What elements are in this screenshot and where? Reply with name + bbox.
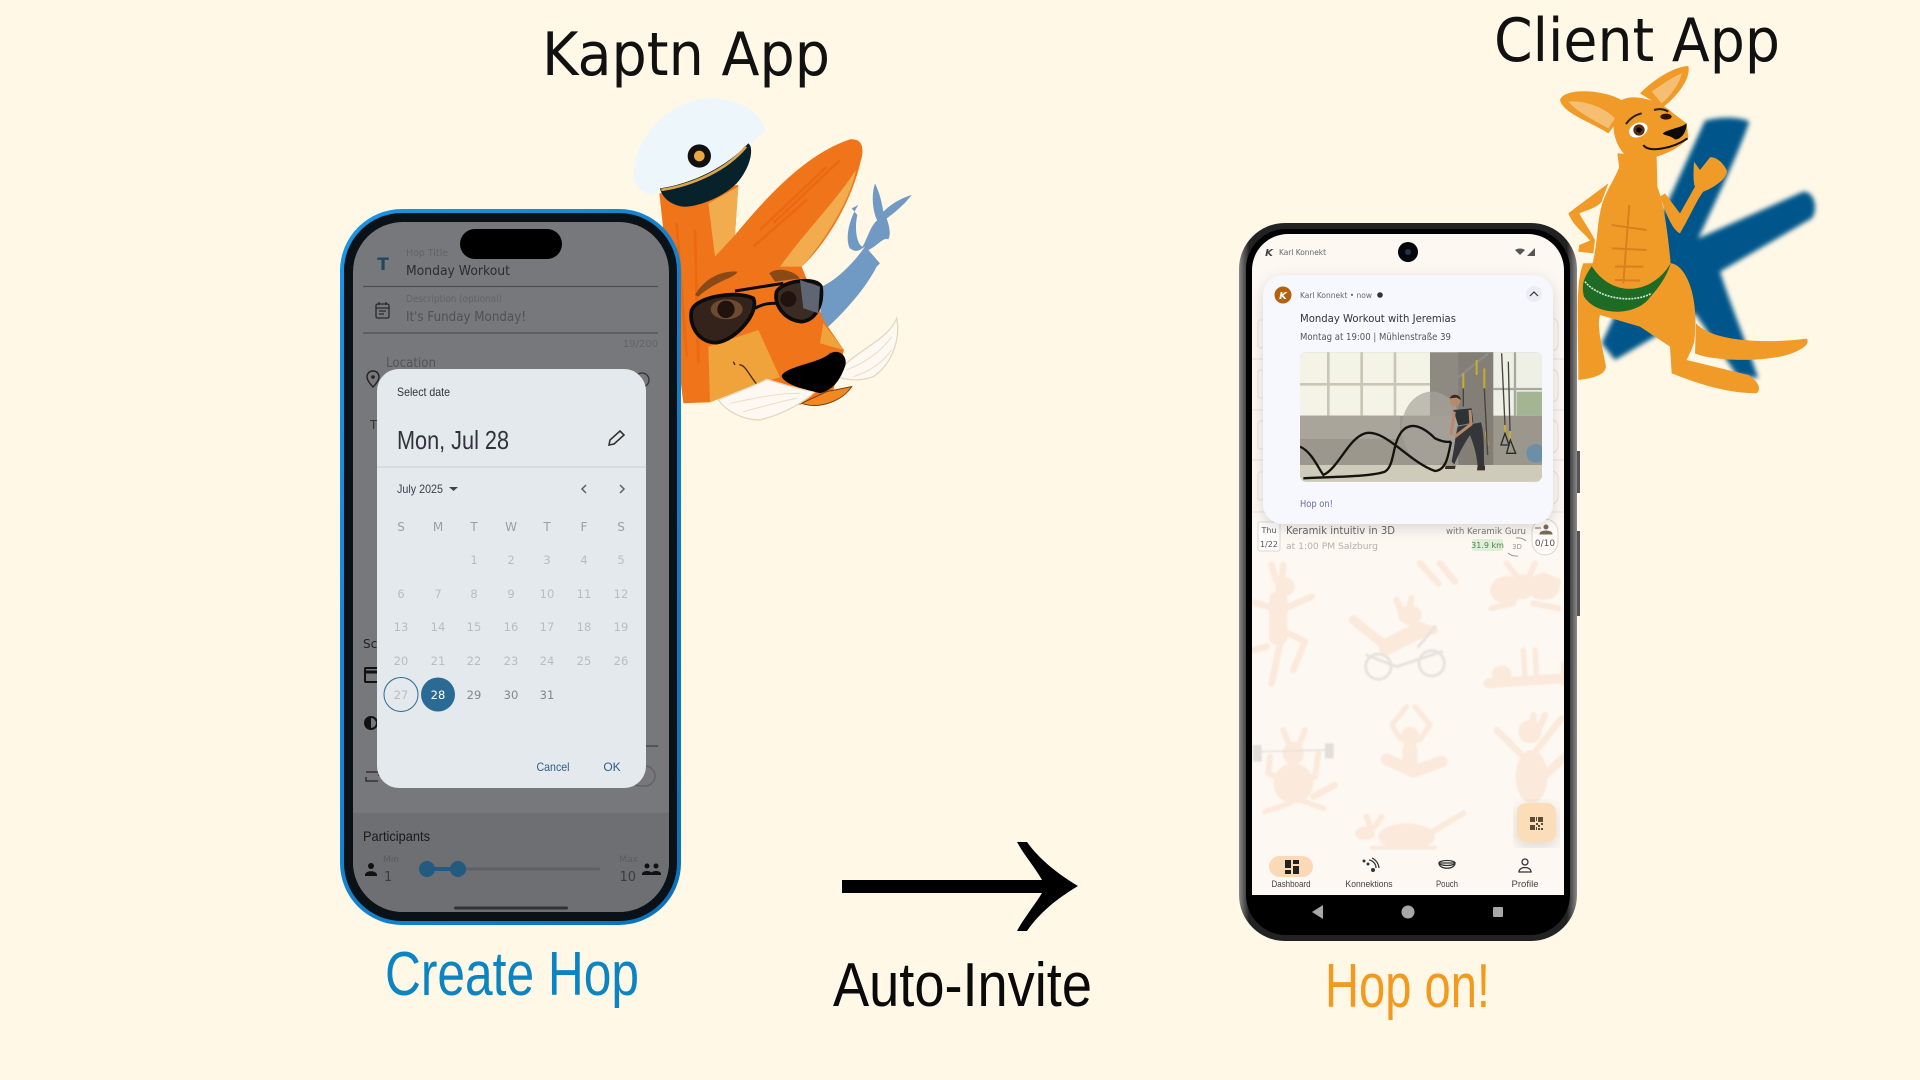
kangaroo lifting barbell bbox=[1257, 730, 1335, 812]
woman bbox=[1445, 395, 1485, 470]
illustration: fox captain mascot bbox=[633, 98, 912, 420]
calendar days: 13 bbox=[394, 620, 408, 634]
calendar days: 19 bbox=[614, 620, 628, 634]
title: Kaptn App: Kaptn App bbox=[542, 20, 830, 90]
eyebrows bbox=[695, 270, 800, 297]
list row: Keramik intuitiv in 3D: Keramik intuitiv in 3D bbox=[1286, 524, 1395, 537]
weekday header bbox=[397, 520, 625, 534]
form fields behind dialog: T bbox=[369, 418, 378, 432]
kangaroo body bbox=[1560, 66, 1808, 393]
description field: 19/200 bbox=[623, 339, 658, 350]
weekday header: T bbox=[542, 520, 551, 534]
date picker dialog: July 2025 bbox=[397, 482, 443, 496]
tab: Pouch: Pouch bbox=[1436, 879, 1458, 889]
calendar days: 24 bbox=[540, 654, 554, 668]
date picker dialog: Select date bbox=[397, 385, 450, 399]
weekday header: S bbox=[617, 520, 625, 534]
list row: Keramik intuitiv in 3D: at 1:00 PM Salzburg bbox=[1286, 542, 1378, 552]
date picker dialog: OK bbox=[603, 760, 621, 774]
calendar days bbox=[384, 553, 628, 712]
label: Auto-Invite: Auto-Invite bbox=[833, 951, 1092, 1020]
title field: Hop Title bbox=[406, 248, 448, 259]
list row: Keramik intuitiv in 3D: 3D bbox=[1512, 543, 1522, 551]
tab: Dashboard: Dashboard bbox=[1272, 879, 1310, 889]
android system buttons bbox=[1312, 905, 1503, 919]
status bar: Karl Konnekt bbox=[1279, 248, 1326, 257]
calendar days: 27 bbox=[394, 688, 408, 702]
tab: Profile: Profile bbox=[1512, 879, 1538, 889]
notification card: K bbox=[1279, 291, 1288, 302]
sunglasses bbox=[691, 280, 821, 343]
weekday header: S bbox=[397, 520, 405, 534]
bottom navigation bbox=[1269, 856, 1538, 889]
title: Client App: Client App bbox=[1494, 6, 1780, 76]
notification card: Hop on! bbox=[1300, 499, 1333, 510]
kangaroo lying bbox=[1488, 650, 1565, 683]
title field: Monday Workout bbox=[406, 264, 510, 279]
notification card: Monday Workout with Jeremias bbox=[1300, 312, 1456, 325]
label: Create Hop: Create Hop bbox=[385, 940, 639, 1009]
fox head bbox=[659, 139, 862, 405]
kangaroo resting bbox=[1355, 813, 1463, 850]
moustache bbox=[718, 318, 898, 420]
side buttons bbox=[1577, 451, 1580, 616]
notification card: Karl Konnekt • now bbox=[1300, 291, 1372, 300]
list row: Keramik intuitiv in 3D: with Keramik Guru bbox=[1446, 527, 1526, 537]
weekday header: W bbox=[505, 520, 517, 534]
calendar days: 16 bbox=[504, 620, 518, 634]
list row: Keramik intuitiv in 3D bbox=[1258, 519, 1558, 556]
calendar days: 9 bbox=[507, 587, 515, 601]
list row: Keramik intuitiv in 3D: 31.9 km bbox=[1471, 541, 1504, 550]
weekday header: M bbox=[433, 520, 443, 534]
calendar days: 11 bbox=[577, 587, 591, 601]
location field bbox=[367, 356, 649, 387]
schedule section stubs: Sc bbox=[363, 637, 377, 651]
calendar days: 26 bbox=[614, 654, 628, 668]
calendar days: 21 bbox=[431, 654, 445, 668]
title field: T bbox=[377, 255, 389, 275]
dynamic island bbox=[460, 229, 562, 259]
tab: Dashboard bbox=[1269, 856, 1313, 889]
participants section: Min bbox=[383, 855, 399, 865]
illustration: kangaroo mascot with blue K bbox=[1560, 66, 1815, 393]
blue K logo bbox=[1602, 118, 1815, 378]
schedule section stubs bbox=[363, 637, 658, 786]
calendar days: 23 bbox=[504, 654, 518, 668]
kangaroo waving bbox=[1253, 565, 1312, 683]
icon: pencil bbox=[609, 431, 624, 445]
calendar days: 12 bbox=[614, 587, 628, 601]
calendar days: 14 bbox=[431, 620, 445, 634]
weekday header: F bbox=[581, 520, 588, 534]
calendar days: 18 bbox=[577, 620, 591, 634]
QR floating button bbox=[1517, 803, 1556, 842]
abdominal lines bbox=[1612, 205, 1647, 283]
notification card bbox=[1263, 275, 1553, 524]
description field: It's Funday Monday! bbox=[406, 310, 526, 325]
phone: Kaptn App date picker bbox=[340, 209, 681, 925]
calendar days: 31 bbox=[540, 688, 554, 702]
calendar days: 22 bbox=[467, 654, 481, 668]
fur strokes bbox=[677, 160, 840, 363]
weekday header: T bbox=[469, 520, 478, 534]
calendar days: 8 bbox=[470, 587, 478, 601]
description field bbox=[363, 294, 658, 350]
gym straps bbox=[1455, 353, 1488, 380]
calendar days: 1 bbox=[470, 553, 478, 567]
participants section: 1 bbox=[384, 870, 392, 885]
kangaroo cycling bbox=[1353, 598, 1444, 679]
calendar days: 5 bbox=[617, 553, 625, 567]
calendar days: 2 bbox=[507, 553, 515, 567]
green pouch belt bbox=[1583, 263, 1671, 312]
nose bbox=[782, 352, 846, 393]
kangaroo yoga bbox=[1387, 707, 1442, 772]
list row: Keramik intuitiv in 3D: Thu bbox=[1260, 526, 1277, 535]
calendar days: 25 bbox=[577, 654, 591, 668]
app avatar bbox=[1274, 286, 1292, 304]
calendar days: 10 bbox=[540, 587, 554, 601]
phone: Client App notification bbox=[1239, 223, 1580, 941]
blue kangaroo silhouette bbox=[820, 183, 912, 328]
calendar days: 15 bbox=[467, 620, 481, 634]
location field: Location bbox=[386, 356, 436, 371]
tab: Konnektions bbox=[1346, 858, 1393, 889]
infographic canvas bbox=[340, 16, 1819, 1020]
mouth bbox=[802, 387, 852, 405]
list row: Keramik intuitiv in 3D: 1/22 bbox=[1260, 540, 1278, 549]
date picker dialog: Mon, Jul 28 bbox=[397, 425, 509, 455]
kangaroo wallpaper pattern bbox=[1253, 563, 1565, 850]
participants section: Participants bbox=[363, 828, 430, 844]
status bar: K bbox=[1265, 248, 1274, 259]
calendar days: 7 bbox=[434, 587, 442, 601]
tab: Profile bbox=[1512, 859, 1538, 889]
calendar days: 17 bbox=[540, 620, 554, 634]
calendar days: 20 bbox=[394, 654, 408, 668]
label: Hop on!: Hop on! bbox=[1325, 952, 1490, 1021]
notification card: Montag at 19:00 | Mühlenstraße 39 bbox=[1300, 332, 1451, 343]
fragment marks bbox=[1420, 563, 1455, 583]
ropes bbox=[1300, 426, 1451, 478]
status bar bbox=[1265, 242, 1535, 262]
photo: battle ropes workout bbox=[1300, 352, 1545, 482]
participants section bbox=[363, 828, 661, 910]
description field: Description (optional) bbox=[406, 294, 502, 305]
arrow: from Kaptn App to Client App bbox=[842, 842, 1078, 931]
phone frame bbox=[340, 209, 681, 925]
date picker dialog bbox=[377, 369, 646, 788]
participants section: Max bbox=[619, 855, 639, 865]
calendar days: 29 bbox=[467, 688, 481, 702]
phone frame bbox=[1239, 223, 1577, 941]
calendar days: 28 bbox=[431, 688, 445, 702]
face bbox=[1626, 109, 1688, 149]
title field bbox=[363, 248, 658, 286]
calendar days: 4 bbox=[580, 553, 588, 567]
calendar days: 3 bbox=[543, 553, 551, 567]
kangaroo stretching bbox=[1497, 715, 1565, 803]
kangaroo sit-up bbox=[1490, 563, 1560, 608]
tab: Konnektions: Konnektions bbox=[1346, 879, 1393, 889]
hat bbox=[633, 98, 765, 207]
tab: Pouch bbox=[1436, 860, 1458, 889]
dialog actions: Cancel bbox=[536, 760, 570, 774]
participants section: 10 bbox=[619, 870, 636, 885]
peeking list rows bbox=[1252, 318, 1564, 512]
calendar days: 30 bbox=[504, 688, 518, 702]
list row: Keramik intuitiv in 3D: 0/10 bbox=[1535, 539, 1555, 549]
calendar days: 6 bbox=[397, 587, 405, 601]
form fields behind dialog bbox=[363, 248, 658, 786]
